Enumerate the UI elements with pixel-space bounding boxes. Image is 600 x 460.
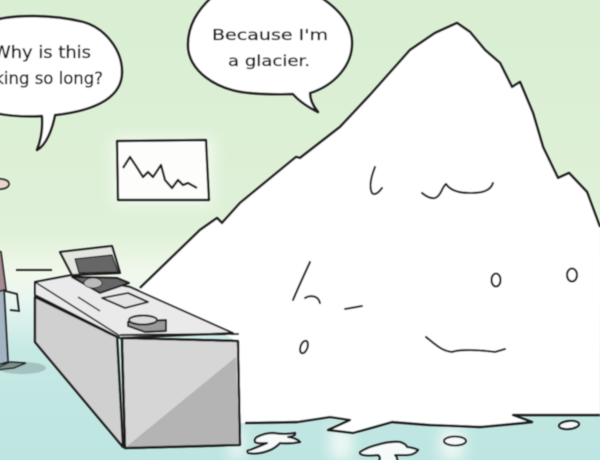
- wall chart: [117, 140, 209, 200]
- laptop: [60, 246, 129, 293]
- speech bubble: customer question: [0, 16, 122, 150]
- desk side: [35, 297, 123, 447]
- chart glow: [112, 136, 214, 206]
- counter edge line: [16, 269, 52, 271]
- meltwater puddles: [247, 420, 579, 460]
- desk front shadow: [126, 357, 239, 447]
- glacier face marks: [293, 167, 577, 354]
- speech bubble: glacier answer: a glacier.: [228, 52, 310, 70]
- paper on desk: [102, 293, 148, 308]
- desk top: [35, 275, 233, 338]
- floor highlights: [230, 428, 464, 460]
- counter desk: [35, 275, 240, 448]
- person at left edge: [0, 179, 46, 374]
- speech bubble: glacier answer: [188, 0, 352, 112]
- desk front: [122, 338, 240, 448]
- bell on desk: [128, 316, 166, 332]
- speech bubble: glacier answer: Because I'm: [212, 26, 328, 44]
- glacier mountain: [140, 23, 600, 433]
